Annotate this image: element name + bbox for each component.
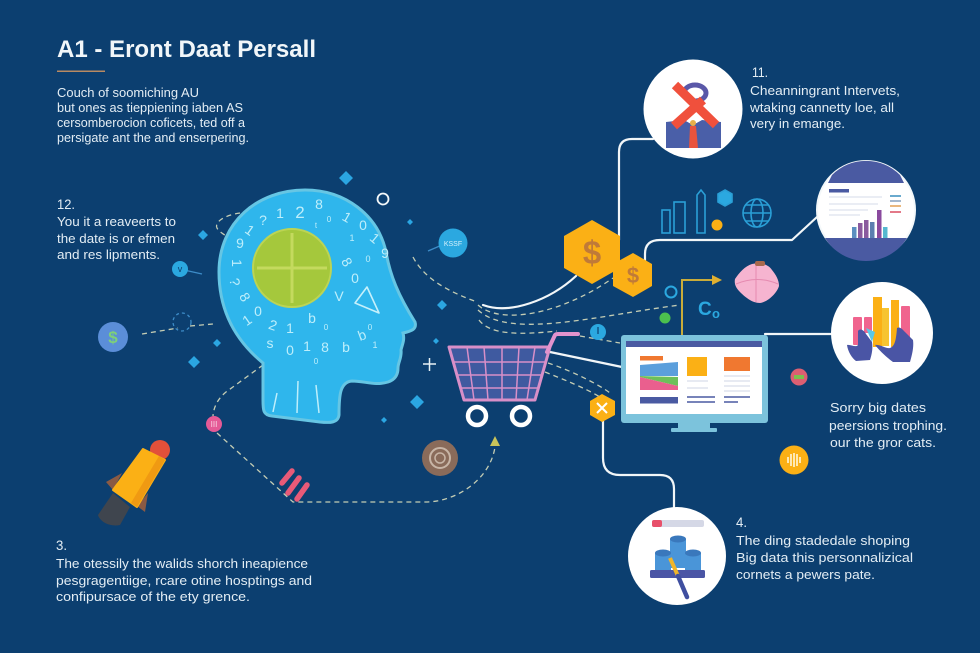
text block: 4: cornets a pewers pate. (736, 567, 875, 582)
panel: hands chart circle (831, 282, 933, 384)
icon: pink dashes (282, 471, 307, 499)
icon: yellow coin (780, 446, 808, 474)
number glyphs: 1 (286, 320, 294, 336)
number glyphs: b (342, 339, 350, 355)
text block: 12: and res lipments. (57, 247, 160, 262)
text block: 3 (56, 537, 312, 604)
number glyphs: 9 (236, 235, 244, 251)
number glyphs: 1 (372, 340, 378, 350)
panel: tie icon circle (644, 60, 742, 158)
icon: blue label badge (428, 228, 468, 258)
number glyphs: 0 (365, 254, 371, 264)
number glyphs: 1 (303, 338, 311, 354)
number glyphs: 2 (295, 203, 305, 222)
number glyphs: 8 (338, 255, 356, 270)
number glyphs: 0 (327, 215, 332, 224)
icon: large dollar hexagon: $ (583, 234, 601, 271)
number glyphs: b (356, 326, 369, 344)
number glyphs (226, 196, 389, 366)
text block: intro: but ones as tieppiening iaben AS (57, 100, 243, 115)
small floating icons: o (712, 306, 720, 321)
text block: intro: persigate ant the and enserpering. (57, 130, 249, 145)
text block: intro: cersomberocion coficets, ted off a (57, 115, 246, 130)
small floating icons: C (698, 299, 712, 320)
screen chart (640, 362, 678, 390)
icon: pink node: III (211, 420, 217, 429)
small floating icons (590, 286, 720, 340)
text block: 3: pesgragentiige, rcare otine hosptings and (56, 573, 312, 588)
icon: red-green dot (790, 368, 808, 386)
brain core (253, 229, 331, 307)
bar chart (852, 210, 888, 238)
icon: globe (743, 199, 771, 227)
number glyphs: 0 (324, 323, 329, 332)
number glyphs: 1 (276, 205, 284, 221)
icon: pink node (206, 416, 222, 432)
text block: big dates: peersions trophing. (829, 418, 947, 433)
text block: 3: 3. (56, 537, 67, 553)
text block: 11: wtaking cannetty loe, all (749, 100, 894, 115)
text block: 12: 12. (57, 196, 75, 212)
number glyphs: 0 (286, 342, 294, 358)
number glyphs: 9 (381, 245, 389, 261)
number glyphs: 8 (321, 339, 329, 355)
text block: 3: confipursace of the ety grence. (56, 589, 250, 604)
decorative sparkle icons (188, 171, 447, 423)
text block: intro: Couch of soomiching AU (57, 85, 199, 100)
icon: small dollar hexagon (613, 253, 652, 297)
dashed data flows (142, 213, 680, 397)
icon: dollar coin (98, 322, 128, 352)
text block: 4: The ding stadedale shoping (736, 533, 910, 548)
number glyphs: 8 (315, 196, 323, 212)
neck lines (273, 381, 319, 413)
number glyphs: s (266, 335, 274, 351)
title: A1 - Eront Daat Persall (57, 36, 316, 63)
icon: small blue badge: v (178, 264, 183, 274)
text block: 11: 11. (752, 64, 768, 80)
text block: 4: 4. (736, 514, 747, 530)
icon: small blue badge (172, 261, 202, 277)
text block: 12: the date is or efmen (57, 231, 175, 246)
icon: x hexagon (590, 394, 615, 422)
chart icons (662, 190, 771, 233)
number glyphs: 0 (359, 217, 367, 233)
icon: blue label badge: KSSF (444, 241, 462, 248)
number glyphs: 1 (349, 233, 355, 243)
text block: 11: very in emange. (750, 116, 845, 131)
number glyphs: 1 (367, 229, 383, 247)
text block: intro (57, 85, 249, 145)
icon: pink bag (735, 261, 779, 303)
number glyphs: 2 (267, 316, 280, 334)
number glyphs: 8 (236, 290, 254, 305)
text block: big dates (829, 400, 947, 450)
icon: yellow arrow (682, 275, 722, 335)
number glyphs: V (334, 288, 344, 304)
panel: dashboard circle (817, 161, 915, 261)
number glyphs: ? (226, 277, 244, 287)
number glyphs: b (308, 310, 316, 326)
triangle glyph (355, 287, 379, 313)
icon: dashed ring (173, 313, 191, 331)
number glyphs: 0 (351, 270, 359, 286)
number glyphs: 0 (314, 357, 319, 366)
icon: small dollar hexagon: $ (627, 263, 639, 288)
dashed path with arrow to cart (213, 365, 500, 502)
number glyphs: 1 (242, 221, 258, 239)
connector lines (483, 139, 832, 508)
text block: 4 (736, 514, 913, 582)
number glyphs: ? (259, 212, 267, 228)
text block: 12 (57, 196, 176, 262)
text block: big dates: Sorry big dates (830, 400, 927, 415)
text block: 12: You it a reaveerts to (57, 214, 176, 229)
number glyphs: 1 (229, 259, 245, 267)
text block: 4: Big data this personnalizical (736, 550, 913, 565)
panel: database circle (628, 507, 726, 605)
icon: large dollar hexagon (564, 220, 620, 284)
icon: rocket (98, 440, 170, 525)
head with data glyphs (219, 190, 415, 422)
text block: 11: Cheanningrant Intervets, (750, 83, 900, 98)
monitor (621, 335, 768, 432)
number glyphs: 0 (254, 303, 262, 319)
text block: 11 (749, 64, 900, 131)
text block: 3: The otessily the walids shorch ineapience (56, 556, 308, 571)
shopping cart (449, 334, 578, 425)
icon: brown disc (422, 440, 458, 476)
number glyphs: 1 (239, 311, 255, 329)
text block: big dates: our the gror cats. (830, 435, 936, 450)
number glyphs: 1 (340, 208, 355, 226)
number glyphs: t (315, 221, 318, 230)
icon: dollar coin: $ (108, 328, 118, 347)
number glyphs: 0 (368, 323, 373, 332)
